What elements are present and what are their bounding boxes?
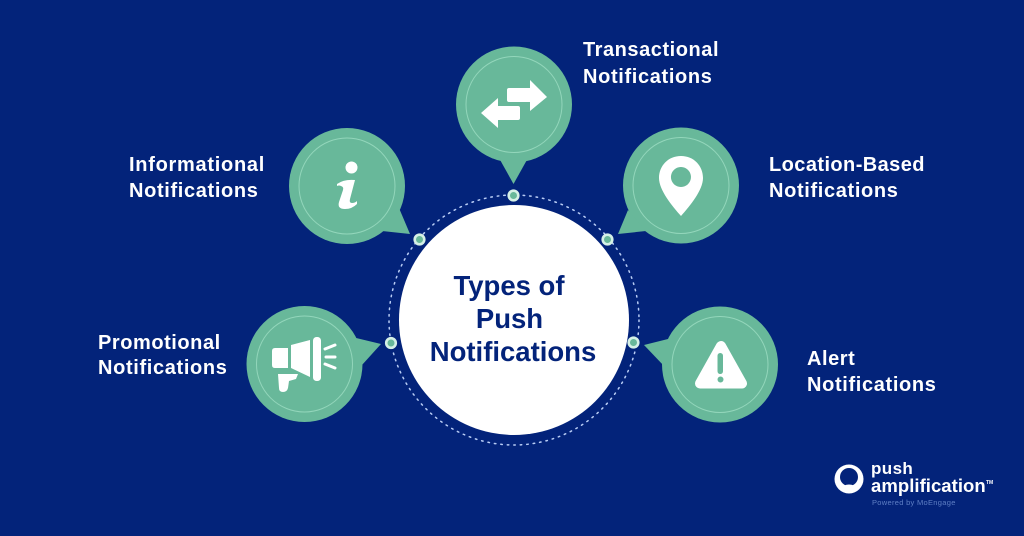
icon: exchange arrows bbox=[481, 80, 547, 128]
icon: logo person bbox=[834, 464, 864, 494]
icon: map pin bbox=[659, 156, 703, 216]
logo: push amplification: Powered by MoEngage bbox=[872, 498, 956, 507]
icon: megaphone bbox=[272, 337, 335, 392]
icon: warning triangle bbox=[700, 346, 742, 384]
center circle with title: Types of bbox=[453, 270, 565, 301]
label: informational: Notifications bbox=[129, 180, 259, 202]
bubble: location-based bbox=[618, 128, 739, 244]
label: alert: Alert bbox=[807, 348, 855, 370]
bubble: promotional bbox=[246, 306, 381, 422]
center circle with title: Push bbox=[476, 303, 543, 334]
label: transactional: Transactional bbox=[583, 39, 719, 61]
logo: push amplification bbox=[834, 459, 993, 507]
connector node: lower right bbox=[629, 338, 638, 347]
logo: push amplification: TM bbox=[986, 480, 993, 486]
bubble: transactional bbox=[456, 46, 572, 184]
label: promotional: Notifications bbox=[98, 357, 228, 379]
connector node: lower left bbox=[386, 338, 396, 348]
bubble: informational bbox=[289, 128, 410, 244]
connector node: upper left bbox=[415, 235, 424, 244]
label: location-based: Notifications bbox=[769, 180, 899, 202]
label: informational: Informational bbox=[129, 154, 265, 176]
bubble: alert bbox=[644, 306, 778, 422]
connector node: upper right bbox=[603, 235, 612, 244]
icon: info i bbox=[337, 162, 358, 209]
label: transactional: Notifications bbox=[583, 66, 713, 88]
center circle with title: Notifications bbox=[430, 336, 596, 367]
label: alert: Notifications bbox=[807, 374, 937, 396]
logo: push amplification: amplification bbox=[871, 475, 986, 496]
center circle with title bbox=[399, 205, 629, 435]
logo: push amplification: push bbox=[871, 459, 913, 478]
label: promotional: Promotional bbox=[98, 332, 221, 354]
label: location-based: Location-Based bbox=[769, 154, 925, 176]
connector node: top bbox=[509, 191, 518, 200]
